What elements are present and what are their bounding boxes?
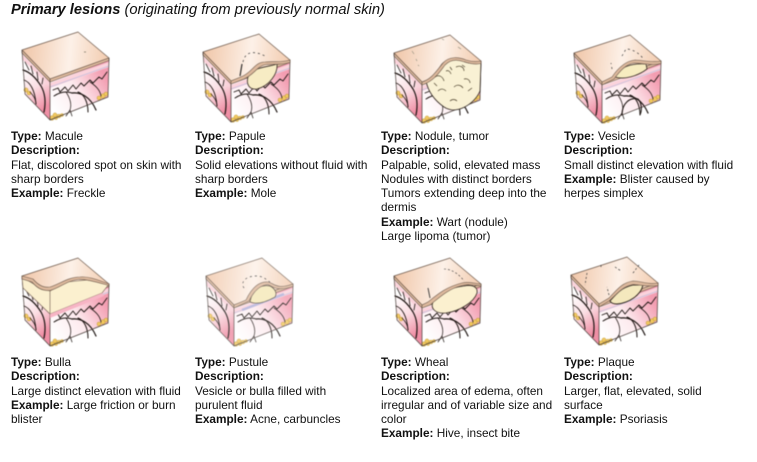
text: wheal: Type: Wheal [381,355,448,369]
text: bulla: Example: Large friction or burn [11,398,176,412]
text: plaque: Type: Plaque [564,355,635,369]
text: vesicle: Description: [564,143,633,157]
text: nodule: Example: Wart (nodule) [381,215,508,229]
text: plaque: surface [564,398,603,412]
text: nodule: Tumors extending deep into the [381,186,546,200]
text: nodule: Description: [381,143,450,157]
text: bulla [11,355,181,426]
text: papule: sharp borders [195,172,268,186]
nodule [394,35,481,123]
text: macule [11,129,181,200]
text: macule: sharp borders [11,172,84,186]
text: vesicle: Example: Blister caused by [564,172,710,186]
text: wheal: Example: Hive, insect bite [381,426,520,440]
text: wheal: Localized area of edema, often [381,384,543,398]
text: pustule: Vesicle or bulla filled with [195,384,326,398]
text: plaque: Larger, flat, elevated, solid [564,384,702,398]
text: vesicle: herpes simplex [564,186,643,200]
text: macule: Flat, discolored spot on skin with [11,158,181,172]
text: nodule: Type: Nodule, tumor [381,129,489,143]
vesicle [574,35,661,123]
title: Primary lesions (originating from previously normal skin) [11,2,385,18]
text: plaque: Example: Psoriasis [564,412,668,426]
text: macule: Example: Freckle [11,186,105,200]
bulla [22,258,109,346]
text: pustule: Description: [195,369,264,383]
text: nodule: Nodules with distinct borders [381,172,532,186]
text: papule: Description: [195,143,264,157]
text: papule: Example: Mole [195,186,276,200]
text: nodule [381,129,546,243]
text: bulla: Description: [11,369,80,383]
text: bulla: Type: Bulla [11,355,71,369]
text: wheal: irregular and of variable size and [381,398,552,412]
text: vesicle: Type: Vesicle [564,129,635,143]
text: papule [195,129,367,200]
text: wheal: color [381,412,407,426]
pustule [206,258,293,346]
text: plaque [564,355,702,426]
text: vesicle: Small distinct elevation with fluid [564,158,733,172]
text: nodule: dermis [381,200,416,214]
macule [22,32,109,120]
text: pustule: Example: Acne, carbuncles [195,412,341,426]
text: macule: Type: Macule [11,129,83,143]
text: bulla: Large distinct elevation with fluid [11,384,181,398]
text: macule: Description: [11,143,80,157]
text: nodule: Large lipoma (tumor) [381,229,490,243]
text: nodule: Palpable, solid, elevated mass [381,158,540,172]
plaque [571,257,658,345]
text: pustule [195,355,341,426]
text: bulla: blister [11,412,42,426]
papule [203,34,290,122]
wheal [394,258,481,346]
text: papule: Type: Papule [195,129,266,143]
text: plaque: Description: [564,369,633,383]
text: vesicle [564,129,733,200]
text: pustule: Type: Pustule [195,355,268,369]
text: pustule: purulent fluid [195,398,263,412]
text: wheal: Description: [381,369,450,383]
text: papule: Solid elevations without fluid with [195,158,367,172]
text: wheal [381,355,552,440]
